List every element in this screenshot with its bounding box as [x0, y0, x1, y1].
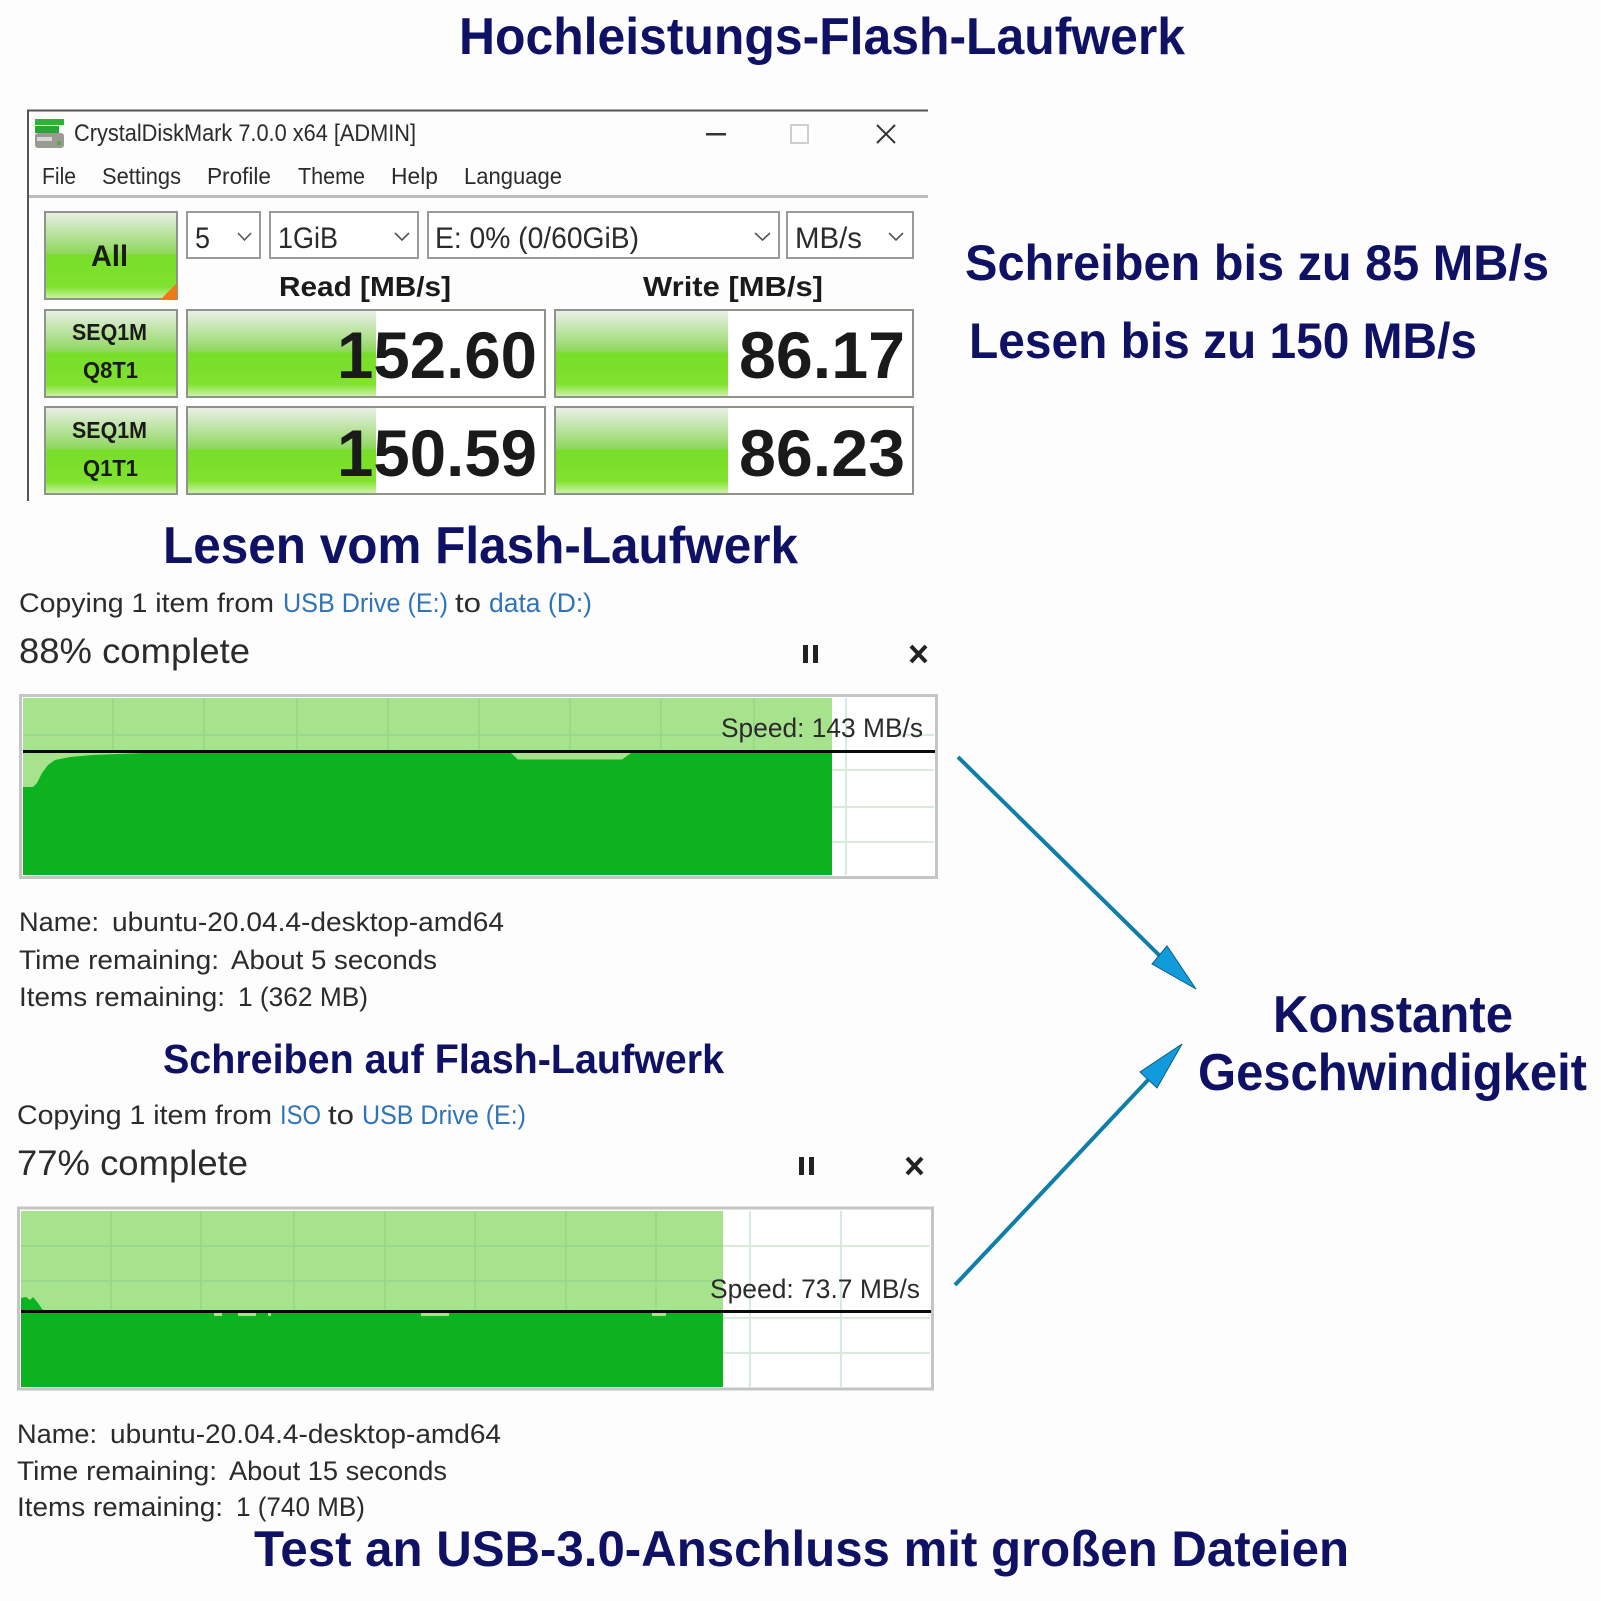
icon: CrystalDiskMark app	[35, 119, 64, 148]
file details	[19, 907, 504, 1012]
menu bar: File	[42, 163, 76, 189]
copy source line: to	[455, 588, 481, 618]
file details	[17, 1419, 501, 1522]
copy source line: data (D:)	[489, 588, 592, 618]
copy source line: Copying 1 item from	[19, 588, 274, 618]
dropdown: unit	[787, 212, 913, 258]
column header: read: Read [MB/s]	[279, 271, 451, 302]
window frame	[28, 110, 928, 501]
copy source line	[17, 1100, 526, 1130]
menu bar: Theme	[298, 163, 365, 189]
file details: ubuntu-20.04.4-desktop-amd64	[112, 907, 504, 937]
menu bar: Profile	[207, 163, 271, 189]
file details: 1 (740 MB)	[236, 1492, 365, 1522]
row: SEQ1M Q1T1: Q1T1	[83, 455, 138, 481]
footer note: Test an USB-3.0-Anschluss mit großen Dateien	[254, 1521, 1349, 1577]
window controls	[706, 125, 895, 143]
speed label: Speed: 73.7 MB/s	[710, 1274, 920, 1304]
speed chart	[18, 1208, 932, 1389]
dropdown: drive	[428, 212, 779, 258]
copy source line	[19, 588, 592, 618]
icon: close	[907, 1158, 922, 1174]
row: SEQ1M Q8T1: Q8T1	[83, 357, 138, 383]
callout: constant speed: Konstante	[1273, 986, 1513, 1044]
file details: About 15 seconds	[229, 1456, 447, 1486]
row: SEQ1M Q1T1: 86.23	[739, 416, 905, 490]
title: Hochleistungs-Flash-Laufwerk	[459, 8, 1185, 66]
heading: write to flash drive: Schreiben auf Flash-Laufwerk	[163, 1036, 724, 1082]
dropdown: size: 1GiB	[278, 222, 338, 255]
panel: CrystalDiskMark window	[28, 110, 928, 501]
callout: constant speed: Geschwindigkeit	[1198, 1044, 1587, 1102]
copy source line: USB Drive (E:)	[283, 588, 448, 618]
button: All	[45, 212, 177, 299]
file details: 1 (362 MB)	[238, 982, 368, 1012]
file details: Name:	[17, 1419, 97, 1449]
row: SEQ1M Q1T1: SEQ1M	[72, 417, 147, 443]
menu bar: Help	[391, 163, 438, 189]
menu bar: Language	[464, 163, 562, 189]
file details: About 5 seconds	[231, 945, 437, 975]
dropdown: count	[187, 212, 260, 258]
dropdown: drive: E: 0% (0/60GiB)	[435, 222, 639, 255]
arrow: from write chart	[955, 1044, 1182, 1285]
file details: Items remaining:	[17, 1492, 223, 1522]
progress percent: 77% complete	[17, 1144, 248, 1183]
button: All: All	[91, 240, 128, 273]
menu bar	[42, 163, 562, 189]
speed chart	[20, 696, 936, 878]
icon: pause	[799, 1157, 814, 1175]
callout: constant speed	[1198, 986, 1587, 1102]
panel: read copy dialog	[19, 588, 936, 1012]
row: SEQ1M Q1T1	[45, 407, 913, 494]
panel: write copy dialog	[17, 1100, 932, 1522]
speed label: Speed: 143 MB/s	[721, 713, 923, 743]
window title: CrystalDiskMark 7.0.0 x64 [ADMIN]	[74, 120, 416, 147]
icon: close	[911, 646, 926, 662]
file details: Time remaining:	[19, 945, 219, 975]
copy source line: Copying 1 item from	[17, 1100, 272, 1130]
heading: read from flash drive: Lesen vom Flash-Laufwerk	[163, 517, 798, 575]
arrow: from read chart	[958, 757, 1196, 989]
file details: ubuntu-20.04.4-desktop-amd64	[110, 1419, 501, 1449]
dropdown: size	[270, 212, 418, 258]
file details: Name:	[19, 907, 99, 937]
dropdown: unit: MB/s	[795, 222, 862, 255]
row: SEQ1M Q1T1: 150.59	[337, 416, 537, 490]
row: SEQ1M Q8T1: SEQ1M	[72, 319, 147, 345]
dropdown: count: 5	[195, 222, 210, 255]
callout: write speed: Schreiben bis zu 85 MB/s	[965, 235, 1549, 291]
file details: Items remaining:	[19, 982, 225, 1012]
row: SEQ1M Q8T1: 86.17	[739, 318, 905, 392]
row: SEQ1M Q8T1	[45, 310, 913, 397]
row: SEQ1M Q8T1: 152.60	[337, 318, 537, 392]
copy source line: to	[328, 1100, 354, 1130]
progress percent: 88% complete	[19, 632, 250, 671]
icon: pause	[803, 645, 818, 663]
menu bar: Settings	[102, 163, 181, 189]
callout: read speed: Lesen bis zu 150 MB/s	[969, 313, 1477, 369]
copy source line: ISO	[280, 1100, 321, 1130]
column header: write: Write [MB/s]	[643, 271, 823, 302]
copy source line: USB Drive (E:)	[362, 1100, 526, 1130]
file details: Time remaining:	[17, 1456, 217, 1486]
